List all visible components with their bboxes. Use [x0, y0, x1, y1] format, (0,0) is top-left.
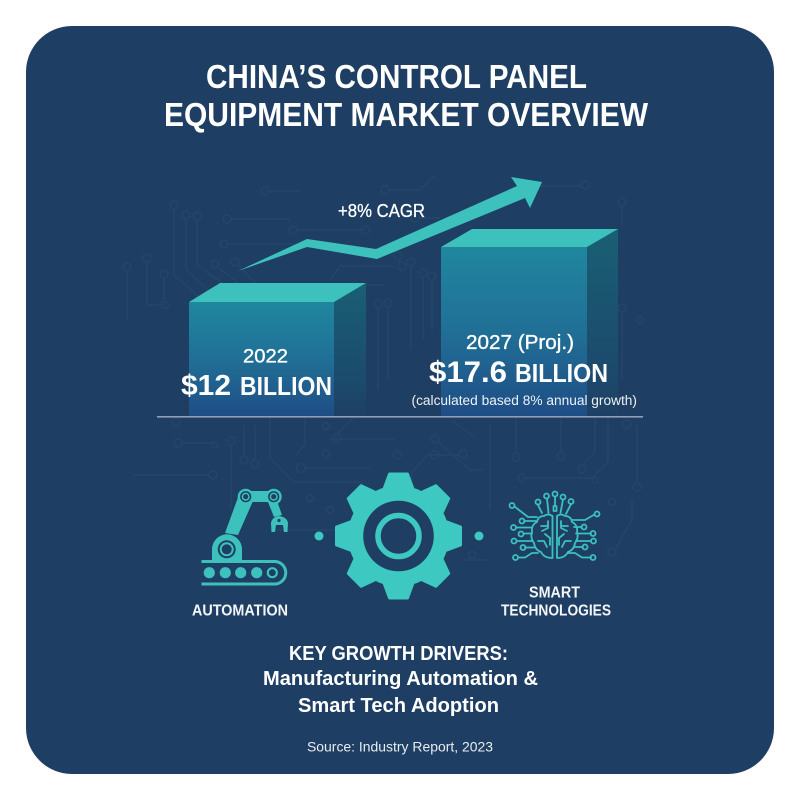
label: 2027 value: 2027 (Proj.) — [466, 332, 574, 354]
bar: 2022 — [189, 283, 366, 417]
label: 2027 value: (calculated based 8% annual growth) — [412, 393, 637, 408]
conveyor belt — [202, 562, 286, 584]
bar chart — [157, 177, 643, 418]
title: EQUIPMENT MARKET OVERVIEW — [164, 96, 649, 133]
bar: 2027 projected — [441, 229, 618, 417]
label: smart technologies: SMART — [529, 584, 580, 602]
icon: robot arm on conveyor — [202, 489, 288, 584]
label: automation: AUTOMATION — [192, 603, 288, 620]
icon: central gear — [336, 474, 460, 598]
label: 2022 value: 2022 — [243, 346, 288, 368]
label: CAGR: +8% CAGR — [338, 200, 425, 221]
robot base — [212, 534, 242, 560]
label: 2027 value — [412, 332, 637, 408]
right traces — [568, 514, 594, 558]
left traces — [514, 506, 538, 558]
key growth drivers text — [263, 643, 538, 717]
label: 2027 value: BILLION — [515, 360, 608, 388]
key growth drivers text: KEY GROWTH DRIVERS: — [289, 643, 508, 665]
gripper — [271, 516, 288, 532]
circuit board background pattern — [123, 175, 644, 560]
label: 2027 value: $17.6 — [429, 356, 507, 389]
label: 2022 value — [181, 346, 332, 402]
arrow: growth trend — [238, 177, 542, 271]
icon: brain with circuits — [510, 492, 600, 560]
label: 2022 value: $12 — [181, 370, 231, 402]
label: smart technologies: TECHNOLOGIES — [501, 603, 611, 620]
connector dot right — [474, 532, 484, 540]
key growth drivers text: Smart Tech Adoption — [298, 695, 499, 717]
axis baseline — [157, 416, 643, 418]
key growth drivers text: Manufacturing Automation & — [263, 668, 538, 690]
title — [164, 58, 649, 133]
trace nodes — [510, 503, 514, 508]
label: smart technologies — [501, 584, 611, 620]
connector dot left — [314, 532, 324, 540]
robot arm — [225, 492, 253, 535]
source note: Source: Industry Report, 2023 — [307, 738, 493, 754]
top traces — [538, 496, 571, 514]
title: CHINA’S CONTROL PANEL — [206, 58, 587, 95]
brain outline — [531, 514, 552, 558]
label: 2022 value: BILLION — [240, 373, 332, 401]
